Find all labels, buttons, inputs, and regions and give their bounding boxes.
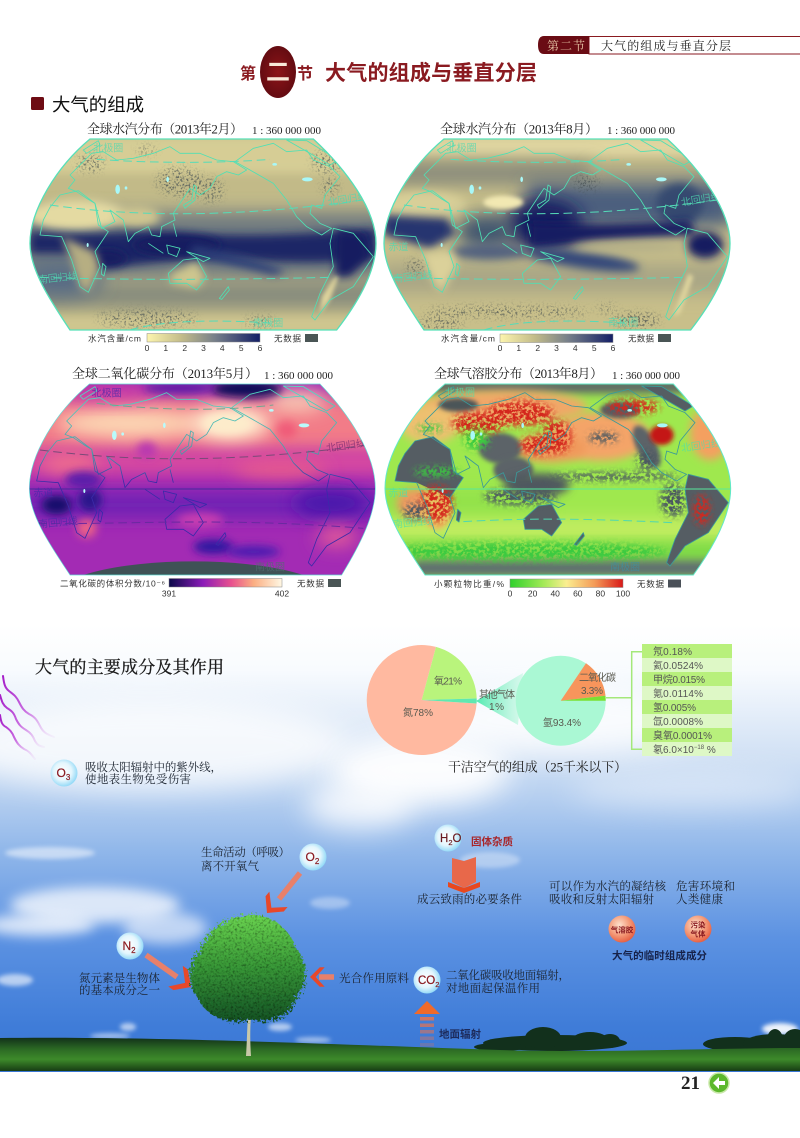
text: ozone role (85, 760, 222, 786)
section title: 第 (240, 64, 256, 83)
text: oxygen role (201, 845, 290, 873)
map: carbon dioxide: 北回归线 (325, 436, 367, 455)
map: aerosol: 南回归线 (392, 514, 433, 531)
bubble: water vapour: O (452, 833, 461, 845)
icon: number seal: 二 (266, 59, 290, 86)
map: carbon dioxide: 赤道 (33, 487, 53, 500)
bubble: nitrogen: 2 (131, 946, 136, 955)
text: pollutant role: 危害环境和 (676, 879, 735, 893)
legend: small particle share: 20 (528, 588, 538, 598)
icon: back arrow (709, 1073, 729, 1093)
bubble: water vapour (434, 824, 462, 852)
distant trees (474, 1027, 800, 1054)
legend: water vapour content: 水汽含量/cm (441, 334, 495, 344)
bubble: water vapour: 2 (448, 838, 452, 847)
arrow: oxygen to tree (258, 873, 300, 921)
bubble: aerosol: 气溶胶 (611, 924, 634, 934)
section title (240, 46, 537, 98)
bubble: aerosol (608, 916, 636, 942)
arrow: photosynthesis input (310, 967, 334, 987)
map title (87, 122, 322, 137)
label: other gases (479, 688, 515, 713)
text: nitrogen role (79, 971, 160, 997)
running header tab (538, 36, 800, 54)
text: aerosol role (549, 879, 666, 906)
breakdown list: trace gases: −18 (694, 745, 705, 751)
text: photosynthesis: 光合作用原料 (339, 971, 410, 985)
legend: water vapour content: 无数据 (628, 334, 654, 344)
breakdown list: trace gases: 氦0.0524% (653, 659, 703, 672)
map title: 1 : 360 000 000 (607, 125, 676, 137)
bubble: oxygen (300, 844, 326, 870)
legend: water vapour content (441, 334, 671, 353)
arrow: ground radiation (414, 1001, 440, 1046)
legend: carbon dioxide volume fraction (60, 578, 341, 598)
map: water vapour Aug: 赤道 (388, 241, 408, 254)
legend: water vapour content: 5 (592, 343, 597, 353)
text: aerosol role: 吸收和反射太阳辐射 (549, 892, 654, 906)
map title: 全球水汽分布（2013年2月） (87, 122, 243, 136)
bubble: polluting gases (684, 916, 712, 942)
legend: water vapour content: 0 (145, 343, 150, 353)
arrow: nitrogen to tree (146, 955, 198, 997)
legend: small particle share: 0 (508, 588, 513, 598)
text: aerosol role: 可以作为水汽的凝结核 (549, 879, 666, 893)
map title: 全球水汽分布（2013年8月） (440, 122, 598, 136)
map title: 1 : 360 000 000 (252, 125, 322, 137)
text: carbon dioxide role: 二氧化碳吸收地面辐射， (446, 968, 570, 982)
breakdown list: trace gases: 氡6.0×10 (653, 745, 694, 756)
text: oxygen role: 离不开氧气 (201, 859, 260, 873)
map title: 1 : 360 000 000 (264, 370, 334, 382)
breakdown list: trace gases: 臭氧0.0001% (653, 729, 712, 742)
bubble: water vapour: H (440, 833, 448, 845)
map: aerosol: 北极圈 (445, 386, 475, 399)
legend: water vapour content: 6 (611, 343, 616, 353)
legend: water vapour content: 2 (182, 343, 187, 353)
legend: small particle share: 小颗粒物比重/% (434, 579, 504, 589)
map: aerosol: 赤道 (388, 487, 408, 500)
running header tab: 大气的组成与垂直分层 (601, 38, 731, 53)
icon: ultraviolet waves (0, 676, 54, 759)
text: carbon dioxide role (446, 968, 570, 995)
pie chart: other gases: 3.3% (581, 686, 603, 697)
breakdown list: trace gases (606, 644, 732, 756)
label: solid impurities: 固体杂质 (471, 835, 514, 848)
legend: small particle share: 40 (550, 588, 560, 598)
legend: water vapour content: 3 (554, 343, 559, 353)
map: aerosol: 南极圈 (610, 561, 640, 574)
arrow: water and impurities (448, 857, 480, 893)
running header tab: 第二节 (547, 38, 585, 53)
bubble: carbon dioxide: CO (418, 975, 435, 987)
legend: small particle share: 60 (573, 588, 583, 598)
pie chart: dry clean air (367, 645, 477, 755)
panel: aerosol August (380, 366, 747, 598)
map: water vapour Aug (380, 133, 747, 333)
legend: water vapour content: 5 (239, 343, 244, 353)
pie chart: other gases: 二氧化碳 (579, 671, 616, 684)
map: carbon dioxide: 北极圈 (92, 387, 122, 400)
legend: water vapour content: 3 (201, 343, 206, 353)
map: water vapour Aug: 南极圈 (608, 316, 638, 329)
text: ozone role: 使地表生物免受伤害 (85, 772, 191, 786)
map title (434, 366, 680, 382)
illustration: tree (190, 915, 306, 1056)
map: carbon dioxide: 南回归线 (37, 514, 78, 531)
text: nitrogen role: 氮元素是生物体 (79, 971, 160, 985)
caption: composition of dry clean air: 干洁空气的组成（25千米以下） (448, 760, 627, 774)
label: other gases: 1% (489, 702, 504, 713)
legend: small particle share (434, 579, 681, 598)
bubble: oxygen: 2 (315, 857, 320, 866)
bubble: ozone (50, 760, 78, 786)
text: pollutant role: 人类健康 (676, 892, 724, 906)
breakdown list: trace gases: 氪0.0114% (653, 687, 703, 700)
bubble: nitrogen: N (122, 939, 131, 953)
breakdown list: trace gases: 甲烷0.015% (653, 673, 705, 686)
breakdown list: trace gases: 氙0.0008% (653, 715, 703, 728)
breakdown list: trace gases: % (704, 745, 716, 756)
map: aerosol: 北回归线 (680, 436, 722, 455)
map: water vapour Aug: 北极圈 (447, 142, 477, 155)
legend: small particle share: 100 (616, 588, 630, 598)
legend: carbon dioxide volume fraction: 391 (162, 588, 176, 598)
map: carbon dioxide (29, 384, 376, 576)
map: water vapour Feb: 南极圈 (253, 317, 283, 330)
map: water vapour Feb (17, 133, 387, 333)
connector: other gases zoom (476, 673, 523, 725)
map: water vapour Feb: 北回归线 (327, 189, 368, 209)
caption: temporary components: 大气的临时组成成分 (612, 949, 708, 962)
legend: carbon dioxide volume fraction: 402 (275, 588, 289, 598)
map: water vapour Aug: 南回归线 (392, 268, 433, 285)
panel: water vapour February (17, 122, 387, 353)
page number: 21 (681, 1073, 700, 1094)
label: other gases: 其他气体 (479, 688, 515, 701)
breakdown list: trace gases: 氖0.18% (653, 645, 692, 658)
text: pollutant role (676, 879, 735, 906)
legend: water vapour content (88, 334, 318, 353)
icon: number seal (260, 46, 296, 98)
pie chart: dry clean air: 氧21% (434, 674, 462, 688)
map: water vapour Feb: 北极圈 (93, 142, 123, 155)
legend: water vapour content: 2 (535, 343, 540, 353)
map: water vapour Aug: 北回归线 (680, 189, 722, 209)
legend: small particle share: 80 (596, 588, 605, 598)
label: ground radiation: 地面辐射 (439, 1028, 482, 1040)
map title: 全球二氧化碳分布（2013年5月） (72, 366, 258, 381)
heading: main components and roles: 大气的主要成分及其作用 (35, 657, 224, 677)
map title: 1 : 360 000 000 (612, 370, 680, 382)
pie chart: dry clean air: 氮78% (403, 706, 433, 719)
legend: water vapour content: 1 (516, 343, 521, 353)
breakdown list: trace gases: 氢0.005% (653, 701, 696, 714)
legend: water vapour content: 4 (220, 343, 225, 353)
bubble: ozone: O (56, 766, 66, 780)
legend: water vapour content: 4 (573, 343, 578, 353)
section title: 大气的组成与垂直分层 (325, 61, 537, 85)
map title (440, 122, 676, 137)
ground (0, 1038, 800, 1071)
legend: carbon dioxide volume fraction: 无数据 (297, 578, 324, 588)
panel: carbon dioxide May (29, 366, 376, 596)
text: nitrogen role: 的基本成分之一 (79, 983, 160, 997)
panel: sky illustration (0, 625, 800, 1072)
bubble: nitrogen (116, 932, 144, 960)
text: ozone role: 吸收太阳辐射中的紫外线， (85, 760, 222, 774)
bubble: oxygen: O (306, 850, 315, 864)
subheading: composition of the atmosphere: 大气的组成 (52, 94, 144, 115)
bubble: polluting gases: 气体 (690, 928, 706, 938)
bubble: ozone: 3 (66, 773, 71, 782)
map: carbon dioxide: 南极圈 (255, 561, 285, 574)
legend: water vapour content: 无数据 (274, 334, 301, 344)
text: oxygen role: 生命活动（呼吸） (201, 845, 290, 859)
legend: water vapour content: 水汽含量/cm (88, 334, 141, 344)
legend: water vapour content: 0 (498, 343, 503, 353)
legend: carbon dioxide volume fraction: 二氧化碳的体积分数/10⁻⁶ (60, 578, 165, 588)
pie chart: other gases (516, 656, 616, 746)
pie chart: other gases: 氩93.4% (543, 716, 581, 729)
map title (72, 366, 334, 382)
legend: water vapour content: 6 (258, 343, 263, 353)
text: carbon dioxide role: 对地面起保温作用 (446, 981, 540, 995)
section title: 节 (297, 65, 313, 83)
bubble: polluting gases: 污染 (690, 920, 706, 930)
legend: small particle share: 无数据 (637, 579, 664, 589)
bubble: carbon dioxide: 2 (435, 980, 439, 989)
bubble: carbon dioxide (414, 966, 440, 994)
map: water vapour Feb: 南回归线 (37, 269, 78, 286)
legend: water vapour content: 1 (163, 343, 168, 353)
text: cloud and rain condition: 成云致雨的必要条件 (417, 892, 522, 906)
map: aerosol (380, 380, 747, 580)
panel: water vapour August (380, 122, 747, 353)
map title: 全球气溶胶分布（2013年8月） (434, 366, 603, 381)
